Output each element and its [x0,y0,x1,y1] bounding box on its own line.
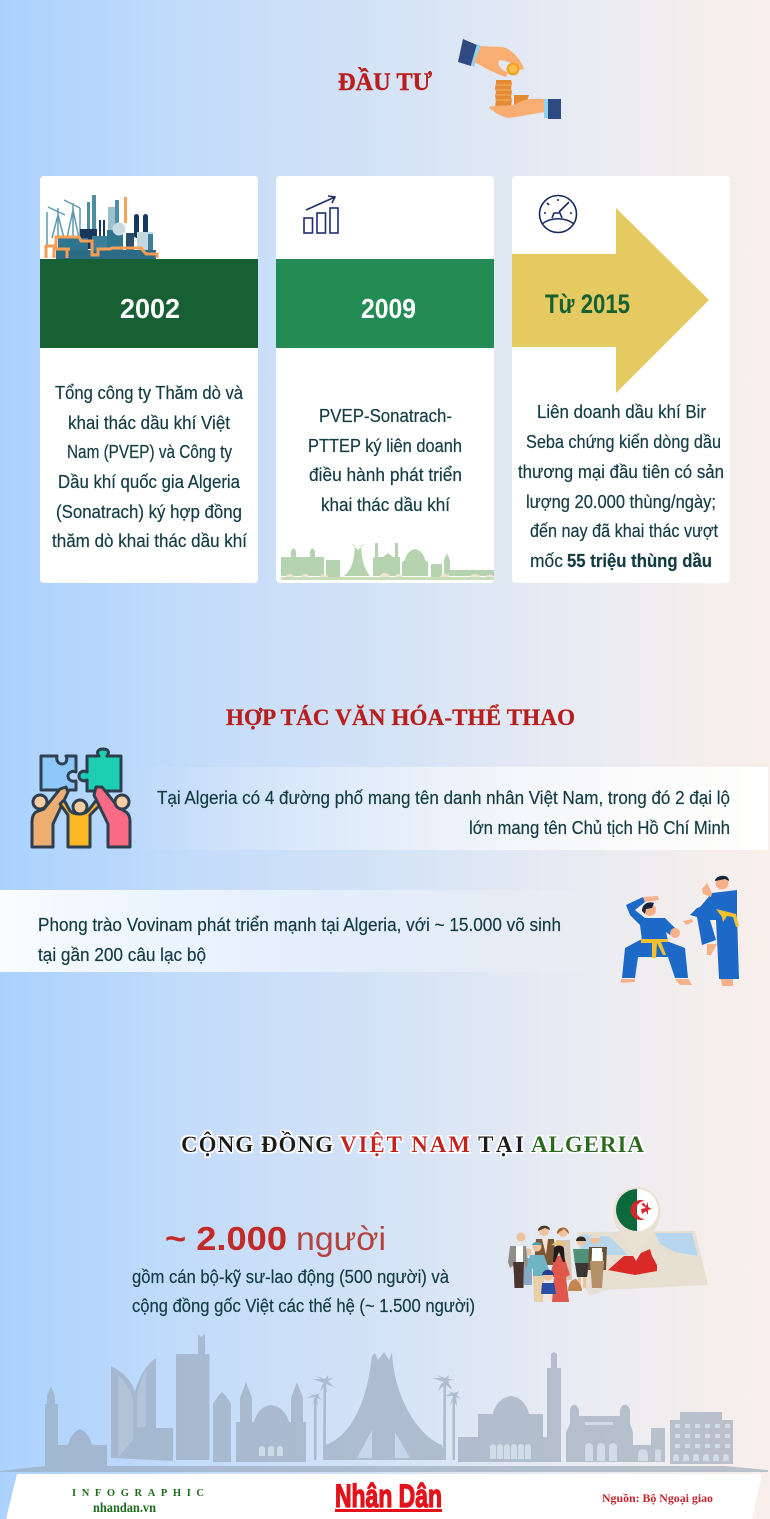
back row people [524,1226,572,1285]
year 2002: 2002 [120,293,180,324]
icon: hands and coins [458,39,561,119]
text 2002: Nam (PVEP) và Công ty [67,442,232,462]
left towers and mosques [45,1334,306,1468]
text 2002 [52,383,247,551]
text 2015: đến nay đã khai thác vượt [530,521,718,541]
panel: 2009 [276,176,494,583]
arrow [512,208,709,393]
community text: gồm cán bộ-kỹ sư-lao động (500 người) và [132,1267,450,1287]
fighter right [683,876,739,986]
ground line [0,1466,768,1472]
text 2015: Liên doanh dầu khí Bir [537,402,706,422]
child in blue [541,1270,556,1301]
year band 2002 [40,259,258,348]
icon: gauge [540,196,576,232]
skyline [0,1334,768,1472]
fighter left [621,896,692,985]
stat: 2,000 people: ~ 2.000 [165,1220,287,1257]
text 2009 [308,406,462,515]
right mosque and buildings [458,1352,733,1464]
heading: Hợp tác văn hóa-thể thao: HỢP TÁC VĂN HÓA-THỂ THAO [226,704,575,730]
text 2015: mốc [530,551,563,571]
illustration: Algeria map and pin [577,1187,708,1296]
text 2015: 55 triệu thùng dầu [567,551,712,571]
Vovinam text: tại gần 200 câu lạc bộ [38,945,206,965]
heading: Cộng đồng Việt Nam tại Algeria: TẠI [478,1132,524,1157]
panel: Vovinam [0,890,610,972]
Martyrs' memorial [325,1352,446,1460]
footer [6,1474,762,1519]
text 2009: điều hành phát triển [309,465,462,485]
palm trees [307,1375,461,1460]
footer: website: nhandan.vn [93,1500,156,1515]
street names text: Tại Algeria có 4 đường phố mang tên danh nhân Việt Nam, trong đó 2 đại lộ [157,788,730,808]
text 2009: khai thác dầu khí [321,495,450,515]
icon: oil refinery [46,195,157,259]
skyline window details [118,1370,730,1461]
text 2002: Tổng công ty Thăm dò và [55,383,244,403]
footer: source: Nguồn: Bộ Ngoại giao [602,1491,713,1505]
street names text: lớn mang tên Chủ tịch Hồ Chí Minh [469,818,730,838]
community text [132,1267,475,1316]
icon: growth chart [304,196,338,233]
footer: Infographic label: INFOGRAPHIC [72,1488,204,1499]
panel: street names [125,767,768,850]
year 2009: 2009 [361,293,416,324]
text 2002: thăm dò khai thác dầu khí [52,531,247,551]
text 2015 [518,402,724,571]
street names text [157,788,730,838]
text 2015: lượng 20.000 thùng/ngày; [526,492,716,512]
stat: 2,000 people: người [296,1220,386,1257]
text 2015: thương mại đầu tiên có sản [518,462,724,482]
icon: people holding puzzle pieces [32,749,130,847]
panel: Từ 2015 [512,176,730,583]
panel: 2002 [40,176,258,583]
footer: Nhân Dân logo: Nhân Dân [335,1478,442,1514]
heading: Cộng đồng Việt Nam tại Algeria [181,1131,644,1157]
text 2009: PVEP-Sonatrach- [319,406,452,426]
Vovinam text: Phong trào Vovinam phát triển mạnh tại Algeria, với ~ 15.000 võ sinh [38,915,561,935]
heading: Cộng đồng Việt Nam tại Algeria: CỘNG ĐỒNG [181,1131,333,1157]
community text: cộng đồng gốc Việt các thế hệ (~ 1.500 người) [132,1296,475,1316]
illustration: Vietnamese community [508,1226,607,1302]
text 2002: Dầu khí quốc gia Algeria [58,472,241,492]
text 2009: PTTEP ký liên doanh [308,436,462,456]
boy in green and dog [568,1236,590,1291]
old man left [508,1232,528,1288]
Vovinam text [38,915,561,965]
green city silhouette [281,543,494,580]
man in blue [526,1242,549,1302]
year Từ 2015: Từ 2015 [545,289,630,319]
stat: 2,000 people [165,1220,386,1257]
woman in red ao dai [550,1240,570,1302]
old man right [588,1234,607,1288]
text 2015: Seba chứng kiến dòng dầu [526,432,721,452]
icon: Vovinam martial artists [621,876,739,986]
text 2002: (Sonatrach) ký hợp đồng [56,502,242,522]
year band 2009 [276,259,494,348]
heading: Cộng đồng Việt Nam tại Algeria: VIỆT NAM [340,1132,470,1157]
heading: Cộng đồng Việt Nam tại Algeria: ALGERIA [531,1132,644,1157]
heading: Đầu tư: ĐẦU TƯ [338,67,432,96]
text 2002: khai thác dầu khí Việt [68,413,230,433]
